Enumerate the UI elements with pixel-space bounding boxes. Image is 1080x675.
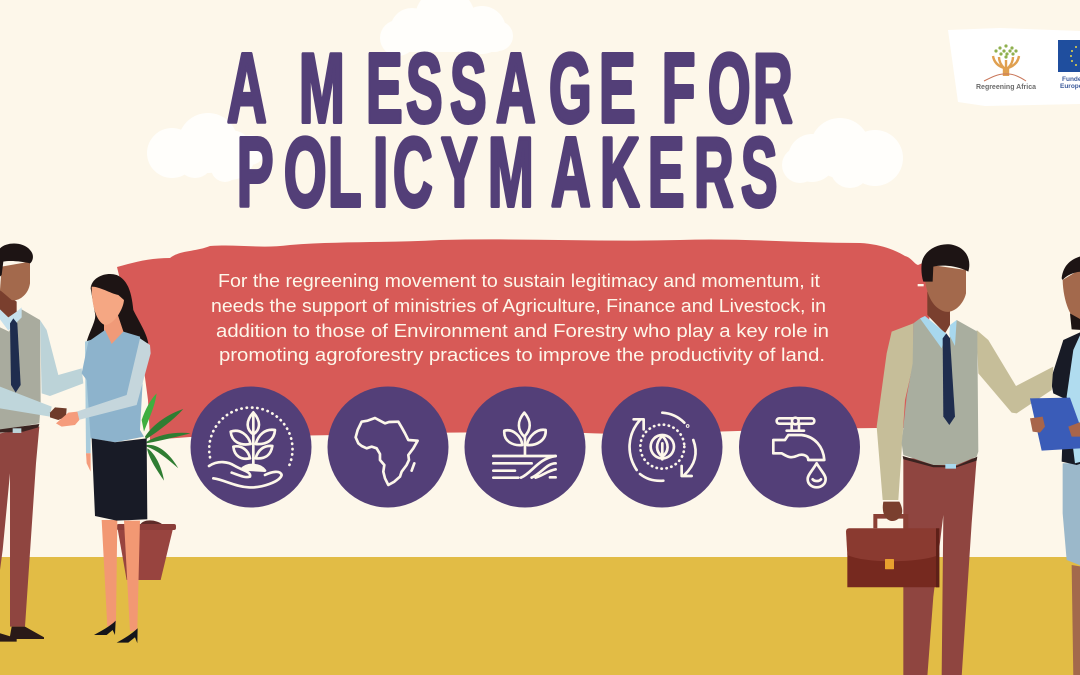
message text: For the regreening movement to sustain legitimacy and momentum, it bbox=[218, 271, 820, 291]
right woman bbox=[1051, 256, 1080, 675]
logo: Regreening Africa tree bbox=[984, 44, 1026, 81]
ground band bbox=[0, 557, 1080, 675]
logo panel bbox=[948, 28, 1080, 106]
left man bbox=[0, 244, 83, 642]
message text: addition to those of Environment and Forestry who play a key role in bbox=[216, 321, 829, 341]
left woman bbox=[56, 274, 151, 643]
red brush panel bbox=[117, 239, 930, 440]
right man bbox=[877, 244, 1053, 675]
funding text bbox=[1060, 76, 1080, 90]
message text: needs the support of ministries of Agriculture, Finance and Livestock, in bbox=[211, 296, 826, 316]
message text: promoting agroforestry practices to improve the productivity of land. bbox=[219, 345, 825, 365]
cloud: left bbox=[147, 113, 265, 182]
cloud: top bbox=[380, 0, 513, 56]
icon circle: plant in hand bbox=[190, 386, 312, 508]
potted plant bbox=[117, 393, 191, 580]
icon row bbox=[190, 386, 860, 508]
title: POLICYMAKERS bbox=[237, 117, 777, 227]
briefcase bbox=[846, 502, 939, 587]
figures: handshake pair, left bbox=[0, 244, 191, 643]
icon circle: Africa map bbox=[328, 386, 448, 508]
EU flag bbox=[1058, 40, 1080, 72]
title: A MESSAGE FOR bbox=[227, 33, 793, 143]
cloud: right bbox=[782, 118, 903, 188]
icon circle: leaf cycle bbox=[602, 386, 722, 508]
clipboard and hands bbox=[1030, 398, 1080, 451]
message text bbox=[211, 271, 829, 365]
title bbox=[227, 33, 793, 227]
icon circle: sprout on field bbox=[464, 386, 586, 508]
icon circle: water tap bbox=[739, 386, 860, 508]
logo text: Regreening Africa bbox=[976, 84, 1036, 91]
figures: colleagues, right bbox=[846, 244, 1080, 675]
